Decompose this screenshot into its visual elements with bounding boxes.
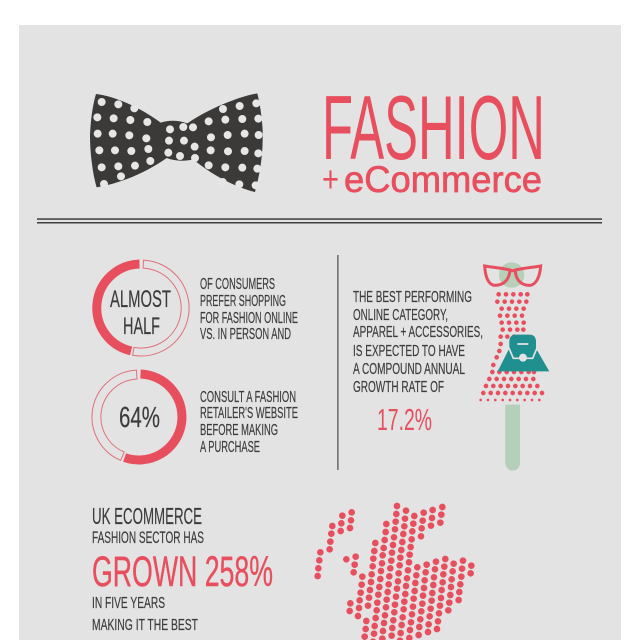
heading: uk ecommerce: FASHION SECTOR HAS [92,528,204,547]
text: best performing category: THE BEST PERFORMING [353,289,472,306]
text: best performing category [353,289,483,396]
text: consult a fashion retailer: RETAILER'S WEBSITE [200,405,298,422]
dress dots [483,294,542,393]
head [499,262,524,288]
ring chart: 64% [92,370,182,460]
title [322,78,545,200]
text: of consumers: PREFER SHOPPING [200,293,286,310]
ring chart: 64%: 64% [119,402,160,434]
text: best performing category: APPAREL + ACCESSORIES, [353,324,483,341]
text: best performing category: A COMPOUND ANNUAL [353,361,465,378]
text: of consumers [200,276,298,343]
glasses [485,266,541,285]
text: consult a fashion retailer: A PURCHASE [200,439,260,456]
text: in five years: MAKING IT THE BEST [92,617,198,634]
text: in five years [92,595,212,640]
leg [505,405,520,471]
stat: 17.2%: 17.2% [377,402,432,437]
ring chart: almost half: HALF [123,313,160,340]
text: of consumers: OF CONSUMERS [200,276,275,293]
subtitle: eCommerce [344,159,542,200]
map: dotted UK [318,506,471,640]
ring chart: almost half [97,260,189,356]
heading: uk ecommerce [92,503,204,547]
handbag [498,335,549,371]
icon: polka dot bow tie [90,93,263,192]
heading: uk ecommerce: UK ECOMMERCE [92,503,202,529]
text: in five years: IN FIVE YEARS [92,595,165,612]
text: best performing category: IS EXPECTED TO HAVE [353,343,465,360]
text: consult a fashion retailer [200,389,298,456]
subtitle: + [322,159,339,200]
text: of consumers: VS. IN PERSON AND [200,326,291,343]
stat: grown 258%: GROWN 258% [92,548,273,596]
icon: woman in polka dot dress [481,262,549,471]
text: best performing category: ONLINE CATEGORY, [353,307,448,324]
text: of consumers: FOR FASHION ONLINE [200,310,298,327]
text: consult a fashion retailer: CONSULT A FASHION [200,389,296,406]
text: best performing category: GROWTH RATE OF [353,379,444,396]
text: consult a fashion retailer: BEFORE MAKING [200,422,278,439]
ring chart: almost half: ALMOST [110,286,171,313]
